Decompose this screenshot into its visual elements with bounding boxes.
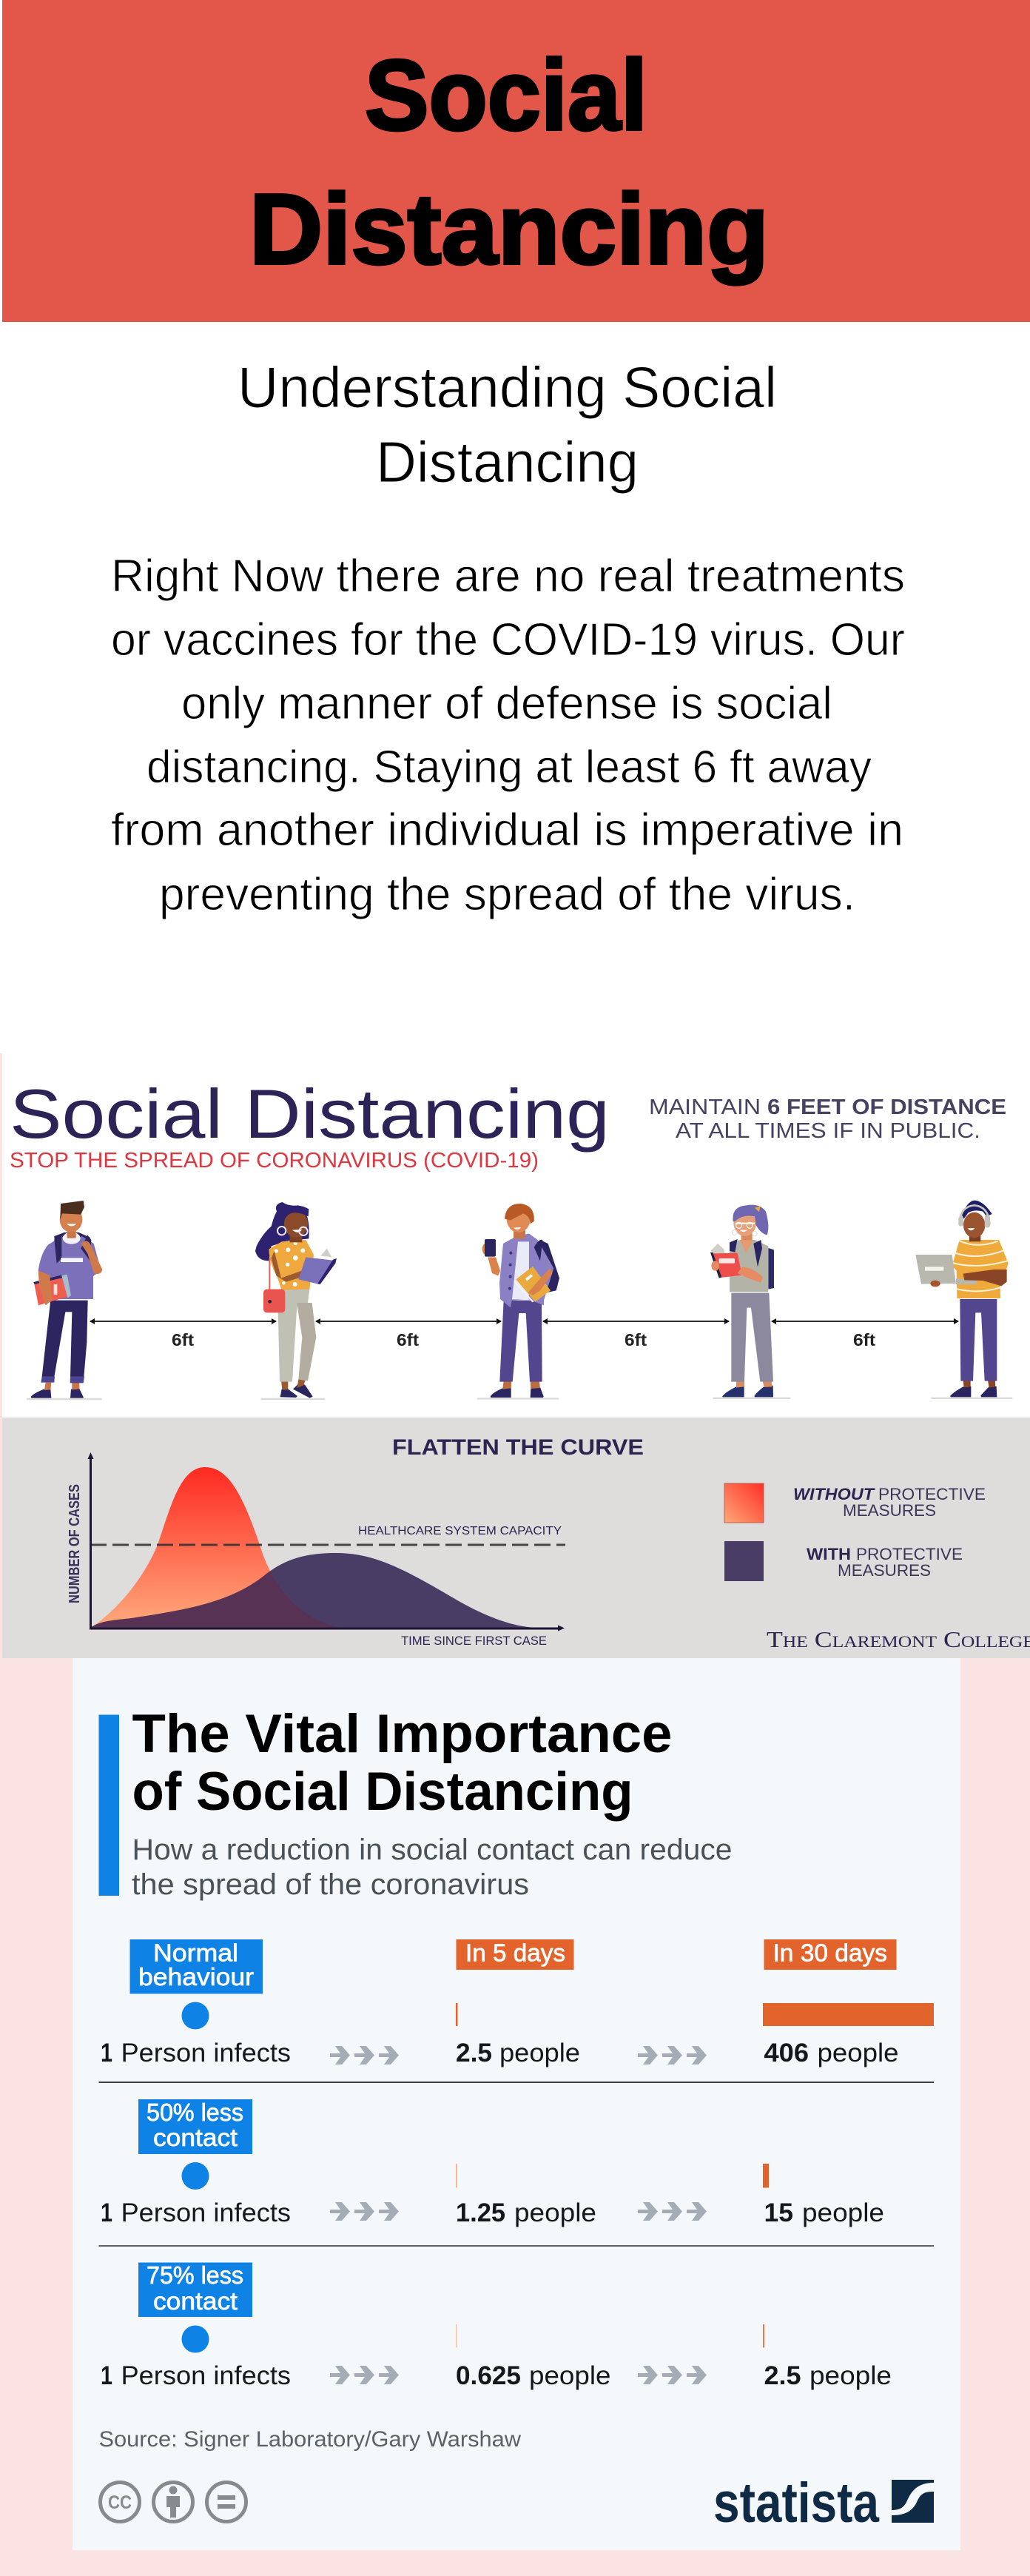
tag: normal behaviour: Normal <box>153 1939 238 1966</box>
axes <box>90 1457 561 1629</box>
y-axis label: NUMBER OF CASES <box>67 1484 83 1603</box>
icon: creative commons licence <box>101 2483 246 2521</box>
tag: 50% less contact <box>138 2099 252 2154</box>
legend text: without: WITHOUT <box>793 1485 875 1503</box>
curve: without protective measures <box>90 1467 342 1628</box>
x-axis label: TIME SINCE FIRST CASE <box>401 1634 547 1648</box>
arrows <box>330 2202 707 2221</box>
distance arrows <box>90 1318 959 1324</box>
college name: The Claremont Colleges <box>767 1626 1030 1652</box>
arrows <box>330 2046 707 2065</box>
label: 406 people: 406 <box>764 2039 809 2067</box>
label: 15 people: 15 <box>764 2198 793 2227</box>
body paragraph: preventing the spread of the virus. <box>159 868 855 920</box>
legend text: with: WITH <box>807 1545 851 1563</box>
legend <box>724 1483 986 1581</box>
illustration title: Social Distancing <box>10 1075 610 1153</box>
statista logo: statista <box>713 2472 880 2535</box>
legend text: with <box>807 1545 963 1580</box>
tag: 75% less contact <box>138 2261 252 2317</box>
row: normal behaviour <box>101 1939 934 2067</box>
label: 0.625 people: people <box>529 2361 611 2390</box>
header banner <box>2 0 1030 322</box>
tag: 50% less contact: contact <box>153 2124 238 2151</box>
subheading: Distancing <box>376 429 639 494</box>
title <box>249 39 769 285</box>
label: 1.25 people <box>456 2198 596 2227</box>
illustration subtitle: STOP THE SPREAD OF CORONAVIRUS (COVID-19) <box>10 1149 539 1173</box>
distance message <box>649 1096 1006 1143</box>
curve: with protective measures <box>90 1553 539 1628</box>
label: 406 people <box>764 2039 898 2067</box>
6ft labels: 6ft <box>397 1330 419 1349</box>
chart heading: FLATTEN THE CURVE <box>392 1435 644 1460</box>
legend text: with: PROTECTIVE <box>856 1545 963 1563</box>
body paragraph: Right Now there are no real treatments <box>111 550 905 602</box>
arrows <box>330 2366 707 2384</box>
source line: Source: Signer Laboratory/Gary Warshaw <box>99 2427 521 2452</box>
icon: creative commons licence: CC <box>108 2492 132 2513</box>
subheading: Understanding Social <box>238 355 777 420</box>
distance message: MAINTAIN <box>649 1096 761 1119</box>
legend text: without: PROTECTIVE <box>878 1485 986 1503</box>
6ft labels: 6ft <box>853 1330 875 1349</box>
legend swatch: with <box>724 1541 764 1581</box>
tag: normal behaviour: behaviour <box>138 1963 254 1990</box>
panel: flatten the curve <box>2 1418 1030 1658</box>
tag: normal behaviour <box>130 1939 263 1994</box>
distance message: AT ALL TIMES IF IN PUBLIC. <box>676 1119 980 1143</box>
card title <box>132 1704 672 1822</box>
card subtitle <box>132 1834 733 1901</box>
row: 50% less contact <box>101 2099 884 2227</box>
title: Social <box>365 39 647 151</box>
label: 2.5 people <box>764 2361 892 2390</box>
panel: statista card <box>73 1658 960 2550</box>
label: 1 person infects: 1 <box>101 2361 112 2390</box>
curve chart <box>67 1452 565 1648</box>
label: 15 people: people <box>802 2198 884 2227</box>
6ft labels <box>172 1330 875 1349</box>
figure: woman reading book <box>255 1202 337 1400</box>
person dot <box>182 2162 209 2190</box>
label: 0.625 people <box>456 2361 611 2390</box>
person dot <box>182 2002 209 2030</box>
card subtitle: How a reduction in social contact can reduce <box>132 1834 733 1866</box>
person dot <box>182 2326 209 2352</box>
label: 1 person infects: Person infects <box>121 2198 291 2227</box>
6ft labels: 6ft <box>172 1330 194 1349</box>
body paragraph <box>111 550 905 920</box>
card title: The Vital Importance <box>132 1704 672 1764</box>
label: 1 person infects: 1 <box>101 2198 112 2227</box>
label: 15 people <box>764 2198 884 2227</box>
label: 406 people: people <box>817 2039 898 2067</box>
distance message: 6 FEET OF DISTANCE <box>767 1096 1006 1119</box>
label: 1 person infects: Person infects <box>121 2361 291 2390</box>
card title: of Social Distancing <box>132 1762 633 1822</box>
body paragraph: or vaccines for the COVID-19 virus. Our <box>111 614 905 665</box>
label: 1 person infects: Person infects <box>121 2039 291 2067</box>
label: 2.5 people: people <box>499 2039 580 2067</box>
legend text: without: MEASURES <box>843 1501 936 1520</box>
tag: 75% less contact: contact <box>153 2287 238 2315</box>
6ft labels: 6ft <box>625 1330 647 1349</box>
bar: 0.625 people <box>456 2324 457 2348</box>
row: 75% less contact <box>101 2261 892 2390</box>
bar: 15 people <box>763 2164 769 2188</box>
bar: 1.25 people <box>456 2164 457 2188</box>
tag: 50% less contact: 50% less <box>147 2099 243 2126</box>
tag: in 30 days: In 30 days <box>772 1939 887 1966</box>
card subtitle: the spread of the coronavirus <box>132 1868 529 1901</box>
figure: person with laptop <box>915 1201 1012 1399</box>
label: 0.625 people: 0.625 <box>456 2361 521 2390</box>
subheading <box>238 355 777 494</box>
body paragraph: only manner of defense is social <box>181 677 832 729</box>
capacity line <box>90 1544 565 1546</box>
capacity label: HEALTHCARE SYSTEM CAPACITY <box>358 1525 562 1537</box>
figure: man with phone <box>477 1204 559 1400</box>
page background <box>0 1053 1030 2576</box>
legend swatch: without <box>724 1483 764 1523</box>
panel: social distancing illustration <box>2 1053 1030 1418</box>
legend text: without <box>793 1485 986 1520</box>
label: 2.5 people: 2.5 <box>456 2039 492 2067</box>
body paragraph: distancing. Staying at least 6 ft away <box>147 741 872 793</box>
bar: 406 people <box>763 2003 934 2026</box>
label: 1.25 people: people <box>514 2198 596 2227</box>
tag: in 5 days: In 5 days <box>465 1939 565 1966</box>
label: 2.5 people: 2.5 <box>764 2361 801 2390</box>
label: 1 person infects: 1 <box>101 2039 112 2067</box>
title: Distancing <box>249 173 769 285</box>
label: 2.5 people <box>456 2039 580 2067</box>
tag: 75% less contact: 75% less <box>147 2261 243 2289</box>
accent bar <box>99 1714 119 1896</box>
legend text: with: MEASURES <box>838 1561 931 1580</box>
label: 1.25 people: 1.25 <box>456 2198 505 2227</box>
bar: 2.5 people <box>456 2003 457 2026</box>
label: 2.5 people: people <box>809 2361 892 2390</box>
body paragraph: from another individual is imperative in <box>111 804 903 856</box>
figure: woman with ponytail and book <box>710 1205 790 1399</box>
figure: student with books <box>27 1201 102 1400</box>
bar: 2.5 people <box>763 2324 764 2348</box>
